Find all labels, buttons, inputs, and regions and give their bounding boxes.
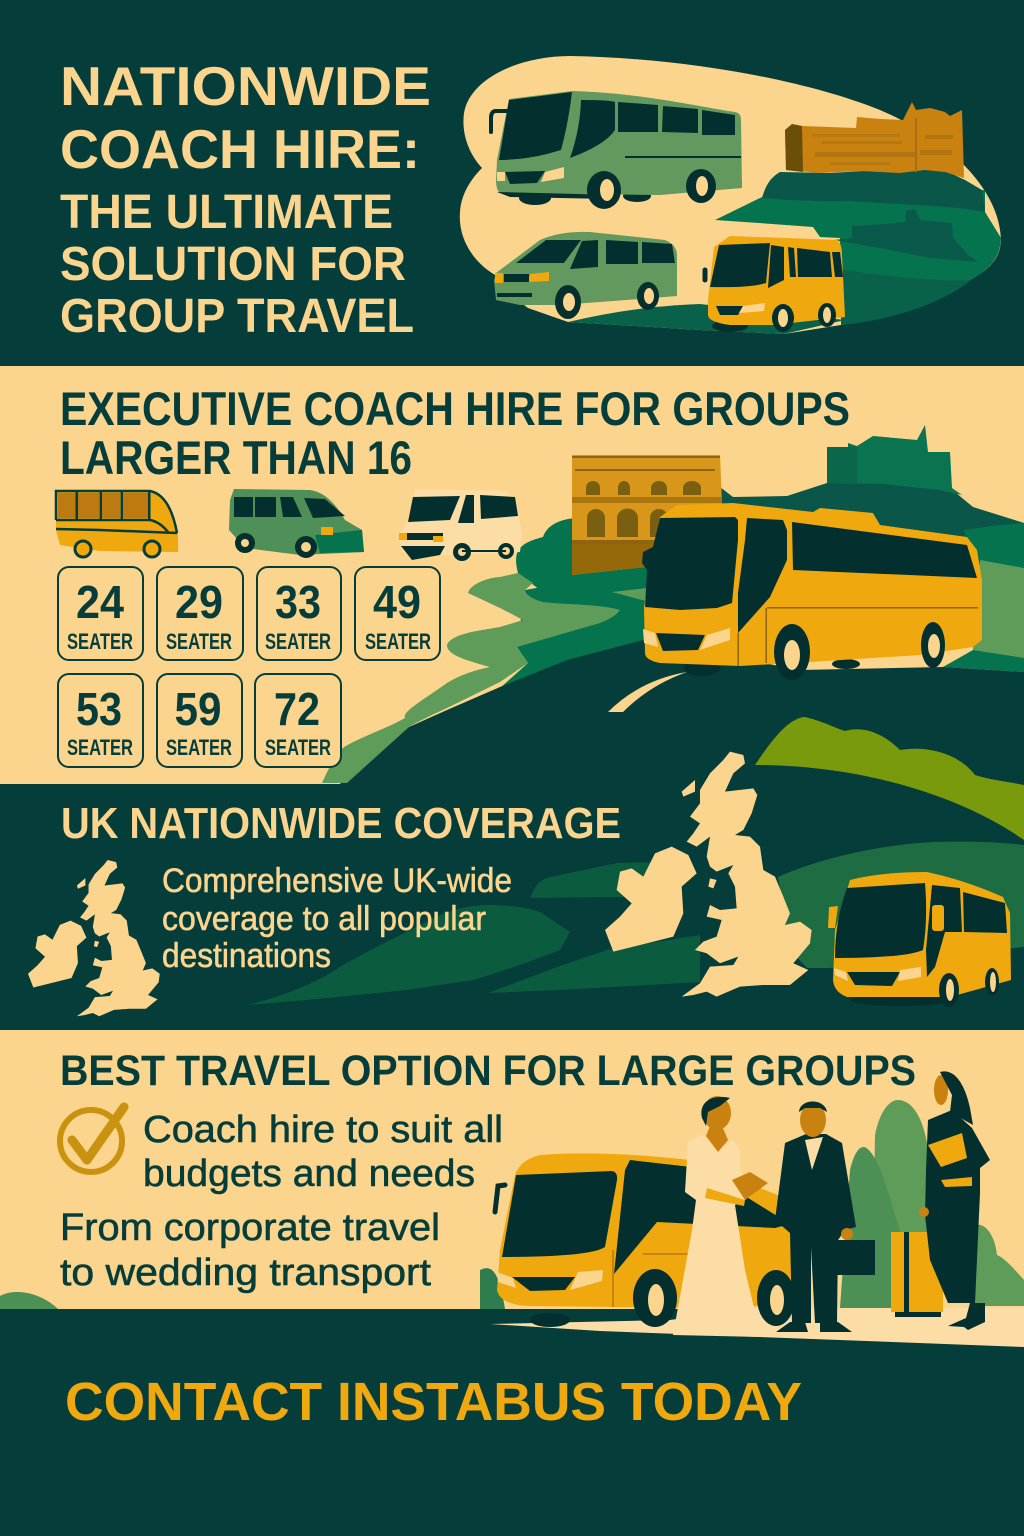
badge: 29 seater: [157, 567, 243, 660]
tree cluster: [516, 518, 660, 590]
arched building: [572, 455, 722, 575]
main title: COACH HIRE:: [60, 118, 420, 180]
benefit text: Coach hire to suit all: [143, 1109, 503, 1151]
coverage description: coverage to all popular: [162, 900, 486, 938]
badge: 72 seater: 72: [274, 683, 320, 735]
badge: 33 seater: [257, 567, 341, 660]
section heading: best travel option: BEST TRAVEL OPTION FOR LARGE GROUPS: [60, 1047, 916, 1095]
icon: white van: [399, 489, 522, 561]
green minibus: [494, 232, 677, 319]
groom: [775, 1102, 875, 1332]
section heading: executive coach hire: EXECUTIVE COACH HIRE FOR GROUPS: [60, 382, 850, 435]
coverage description: [162, 862, 512, 975]
benefit text: to wedding transport: [60, 1252, 431, 1294]
section heading: executive coach hire: [60, 382, 850, 484]
badge: 72 seater: SEATER: [265, 735, 331, 760]
coach: [495, 1153, 795, 1327]
main title: NATIONWIDE: [60, 55, 431, 117]
coverage section landscape: [247, 717, 1024, 1005]
badge: 59 seater: SEATER: [166, 735, 232, 760]
light green hill at right: [973, 560, 1024, 658]
badge: 29 seater: SEATER: [166, 629, 232, 654]
badge: 24 seater: 24: [76, 576, 124, 628]
badge: 24 seater: [58, 567, 143, 660]
badge: 33 seater: 33: [275, 576, 321, 628]
pale roadway: [490, 1308, 1024, 1347]
left band main: [247, 905, 570, 1005]
hill behind castle: [640, 483, 1024, 600]
section heading: UK nationwide coverage: UK NATIONWIDE COVERAGE: [61, 799, 621, 848]
landscape with road and castle: [322, 425, 1024, 800]
badge: 24 seater: SEATER: [67, 629, 133, 654]
businesswoman: [919, 1071, 990, 1330]
yellow coach, front view: [828, 872, 1011, 1007]
yellow coach with people: [495, 1071, 990, 1337]
main title: SOLUTION FOR: [60, 238, 406, 291]
green hillside: [715, 190, 1001, 325]
background trees: [480, 1100, 1024, 1309]
panel: executive coach hire background: [0, 366, 1024, 784]
suitcase: [891, 1232, 943, 1317]
badge: 49 seater: SEATER: [365, 629, 431, 654]
bride: [673, 1096, 768, 1337]
main title: THE ULTIMATE: [60, 186, 393, 239]
small light green road patch: [612, 588, 647, 601]
badge: 49 seater: [355, 567, 440, 660]
badge: 53 seater: SEATER: [67, 735, 133, 760]
dark castle hill: [762, 168, 985, 212]
icon: yellow coach: [56, 491, 178, 557]
small hill left: [0, 1292, 58, 1309]
mid green hill at right: [943, 523, 1024, 672]
icon: small UK map: [28, 860, 160, 1016]
icon: gold check mark: [60, 1107, 124, 1172]
benefit text: From corporate travel: [60, 1207, 440, 1249]
coverage description: destinations: [162, 937, 331, 975]
left band upper: [530, 862, 660, 898]
main title: [60, 55, 431, 343]
badge: 49 seater: 49: [373, 576, 421, 628]
call to action: CONTACT INSTABUS TODAY: [65, 1372, 802, 1432]
green coach: [491, 91, 742, 209]
olive hill: [755, 717, 1024, 840]
badge: 72 seater: [255, 674, 341, 767]
dark foreground hill: [340, 640, 1024, 800]
winding light green road: [322, 573, 620, 783]
icon: large UK map: [605, 752, 812, 997]
yellow minibus: [705, 236, 845, 332]
lower dark field: [841, 270, 971, 325]
icon: green van: [229, 489, 364, 558]
large yellow coach: [642, 503, 982, 680]
badge: 59 seater: 59: [174, 683, 222, 735]
benefit text: budgets and needs: [143, 1153, 475, 1195]
castle: [785, 102, 964, 178]
castle silhouette: [834, 209, 978, 262]
left band lower: [488, 935, 700, 993]
mid green road edge: [500, 565, 655, 688]
green mid hill: [778, 842, 1024, 968]
cream blob background: [460, 56, 1001, 334]
seater capacity badges: [58, 567, 440, 767]
badge: 33 seater: SEATER: [265, 629, 331, 654]
distant castle: [827, 425, 962, 495]
coverage description: Comprehensive UK-wide: [162, 862, 512, 900]
badge: 59 seater: [157, 674, 242, 767]
badge: 53 seater: [58, 674, 143, 767]
section heading: executive coach hire: LARGER THAN 16: [60, 431, 412, 484]
header illustration: coaches and castle: [460, 56, 1001, 334]
panel: best travel option background: [0, 1030, 1024, 1309]
badge: 53 seater: 53: [76, 683, 122, 735]
road highlight: [608, 672, 687, 712]
badge: 29 seater: 29: [175, 576, 223, 628]
benefit text: [60, 1109, 503, 1294]
main title: GROUP TRAVEL: [60, 290, 414, 343]
